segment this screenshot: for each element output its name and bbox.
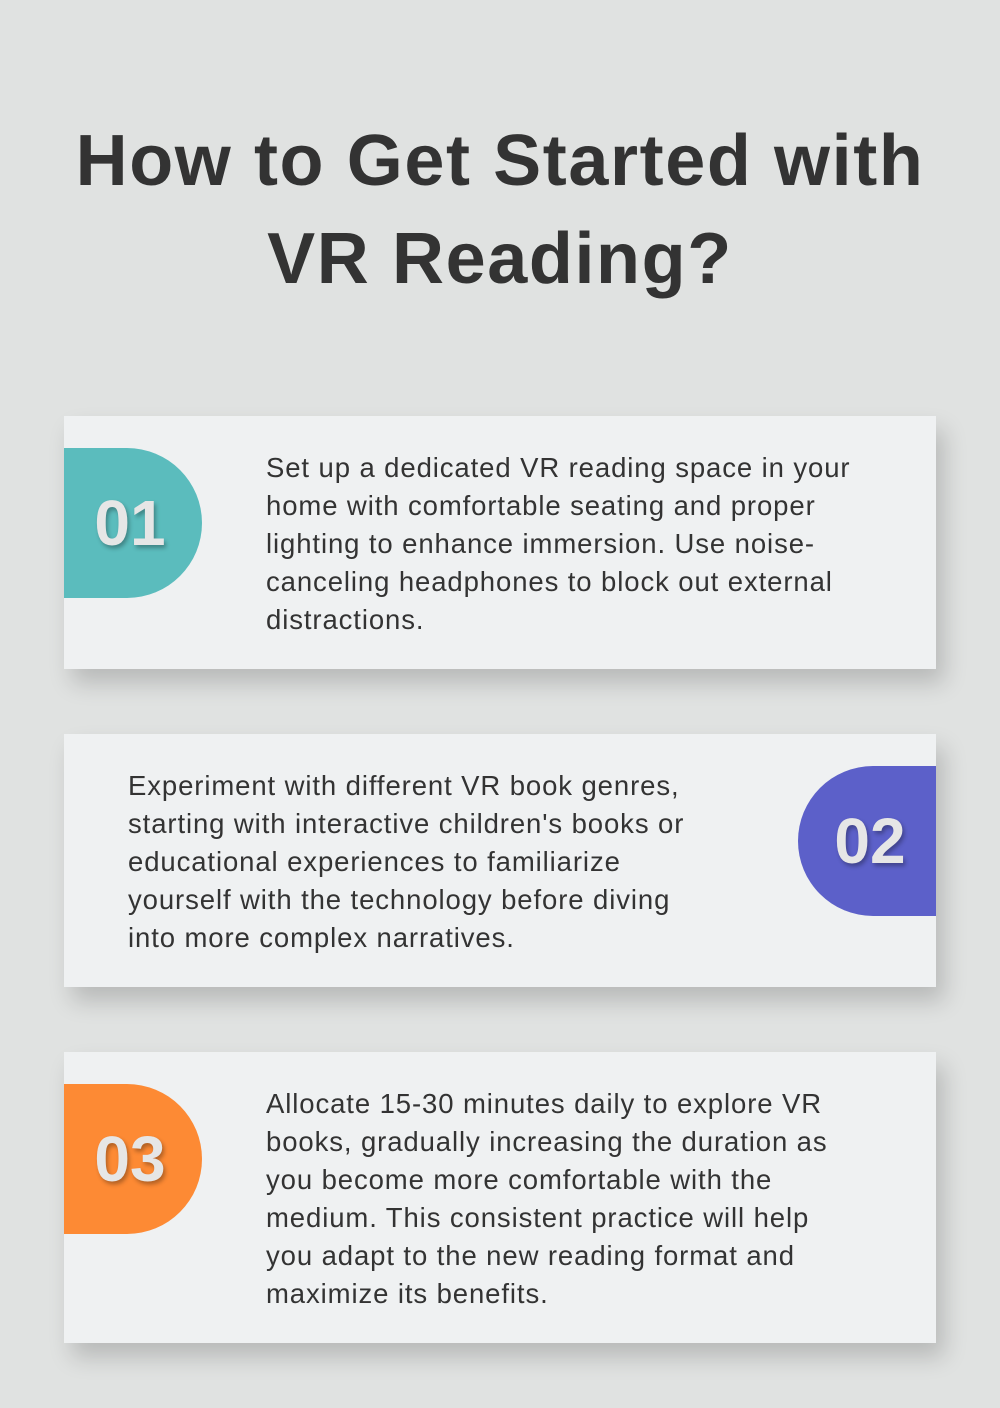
text step 2: yourself with the technology before diving	[128, 884, 670, 915]
badge 01	[64, 448, 202, 598]
text step 1: lighting to enhance immersion. Use noise-	[266, 528, 815, 559]
panel: step 3	[64, 1052, 936, 1343]
title: VR Reading?	[267, 219, 733, 299]
text step 3: Allocate 15-30 minutes daily to explore VR	[266, 1088, 822, 1119]
text step 2: starting with interactive children's books or	[128, 808, 684, 839]
badge 01: 01	[94, 487, 166, 559]
text step 1	[266, 452, 850, 635]
text step 2: Experiment with different VR book genres,	[128, 770, 680, 801]
text step 3: you become more comfortable with the	[266, 1164, 772, 1195]
text step 3: books, gradually increasing the duration as	[266, 1126, 828, 1157]
panel: step 1	[64, 416, 936, 669]
text step 2	[128, 770, 684, 953]
text step 3: you adapt to the new reading format and	[266, 1240, 795, 1271]
title	[76, 121, 924, 299]
text step 3	[266, 1088, 828, 1309]
badge 02: 02	[834, 805, 906, 877]
badge 03	[64, 1084, 202, 1234]
title: How to Get Started with	[76, 121, 924, 201]
badge 02	[798, 766, 936, 916]
text step 1: Set up a dedicated VR reading space in your	[266, 452, 850, 483]
text step 3: medium. This consistent practice will help	[266, 1202, 809, 1233]
text step 1: canceling headphones to block out external	[266, 566, 833, 597]
text step 3: maximize its benefits.	[266, 1278, 549, 1309]
badge 03: 03	[94, 1123, 166, 1195]
text step 1: distractions.	[266, 604, 424, 635]
text step 1: home with comfortable seating and proper	[266, 490, 816, 521]
text step 2: into more complex narratives.	[128, 922, 515, 953]
panel: step 2	[64, 734, 936, 987]
text step 2: educational experiences to familiarize	[128, 846, 621, 877]
